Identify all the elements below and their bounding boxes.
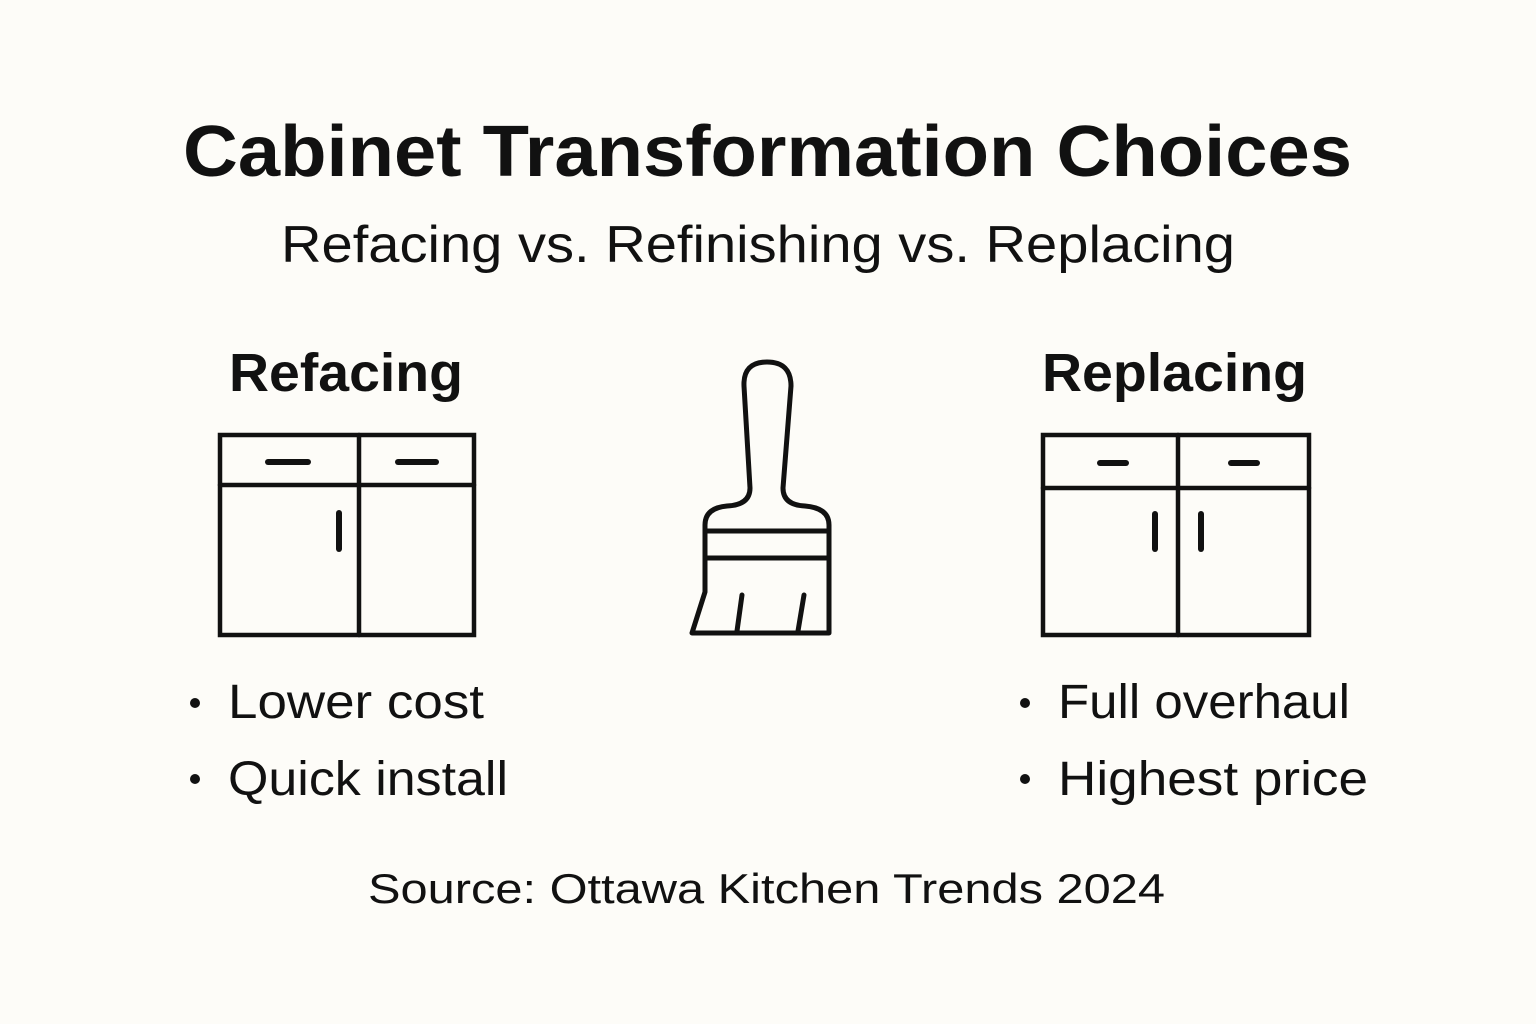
heading: replacing: Replacing [1042, 343, 1307, 403]
subtitle: Refacing vs. Refinishing vs. Replacing [281, 216, 1235, 274]
source note: Source: Ottawa Kitchen Trends 2024 [368, 865, 1165, 912]
panel: refacing [190, 343, 508, 806]
bullets: replacing: Highest price [1058, 753, 1368, 806]
panel: replacing [1020, 343, 1368, 806]
heading: refacing: Refacing [229, 343, 463, 403]
title: Cabinet Transformation Choices [183, 112, 1352, 192]
icon: replacing cabinet [1043, 435, 1309, 635]
bullets: replacing [1020, 676, 1368, 806]
bullets: refacing: Lower cost [228, 676, 484, 729]
bullets: refacing: Quick install [228, 753, 508, 806]
icon: refacing cabinet [220, 435, 474, 635]
icon: paintbrush (refinishing) [692, 362, 829, 633]
bullets: refacing [190, 676, 508, 806]
bullets: replacing: Full overhaul [1058, 676, 1350, 729]
